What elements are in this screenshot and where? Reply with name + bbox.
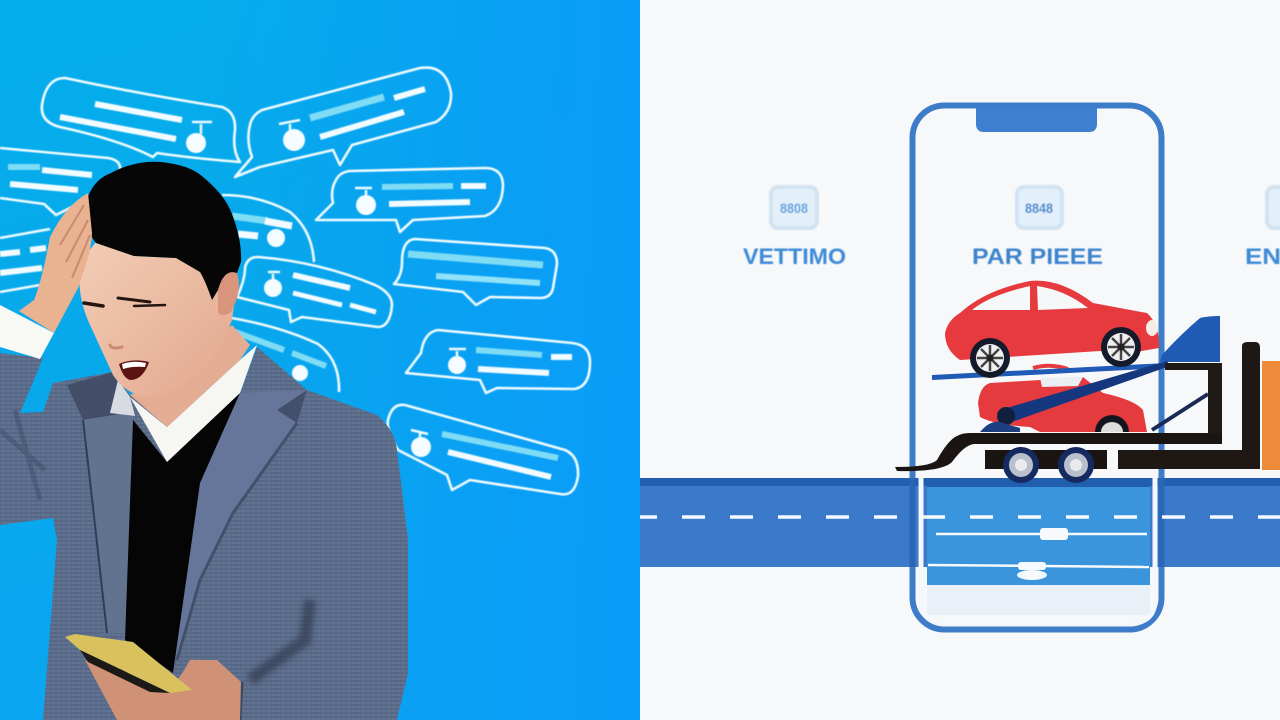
bubble: top right — [235, 68, 451, 177]
road centre dashes — [640, 515, 1280, 519]
bubble: right without icon — [394, 239, 557, 305]
label: vetting: VETTIMO — [743, 244, 846, 269]
chat bubbles cluster — [0, 68, 590, 494]
eyes and brows — [84, 298, 165, 348]
bubble: top left — [42, 78, 240, 162]
icon: cropped step — [1267, 187, 1280, 228]
shirt collar — [110, 345, 257, 462]
mouth — [119, 360, 149, 380]
shirt cuff — [0, 305, 54, 359]
label: pair price: PAR PIEEE — [972, 244, 1103, 269]
label: cropped step: EN — [1245, 244, 1280, 269]
step: cropped at right edge — [1245, 187, 1280, 269]
bubble: left top, cropped — [0, 148, 120, 215]
road band — [640, 478, 1280, 567]
ear — [218, 271, 239, 315]
phone notch — [976, 108, 1097, 132]
phone screen road — [927, 486, 1150, 585]
bubble: behind head — [222, 195, 314, 262]
upper ramp and truck frame — [895, 316, 1260, 483]
neck — [130, 325, 250, 427]
bubble: bottom right — [388, 405, 578, 494]
car carrier truck with red cars — [895, 281, 1280, 483]
lower hand holding phone — [85, 660, 241, 720]
bubble: below center — [226, 317, 339, 392]
jacket — [0, 347, 408, 720]
panel: vehicle transport app on light background — [640, 0, 1280, 720]
orange cargo box — [1262, 361, 1280, 470]
phone — [65, 634, 192, 693]
raised hand — [19, 193, 92, 333]
bubble: left lower, cropped — [0, 229, 50, 292]
jacket shading and lapels — [0, 372, 310, 720]
red car lower — [978, 366, 1147, 432]
phone mockup — [912, 106, 1162, 630]
step: pair price — [972, 187, 1103, 269]
icon: pair price: 8848 — [1025, 200, 1053, 216]
bubble: center right — [237, 257, 392, 327]
red car upper — [945, 281, 1159, 378]
man with hand on head — [0, 162, 408, 720]
icon: vetting: 8808 — [780, 200, 808, 216]
bubble: right of head upper — [316, 168, 503, 232]
panel: frustrated customer on blue background — [0, 0, 640, 720]
face — [79, 242, 236, 397]
bubble: right lower — [406, 330, 590, 393]
hair — [86, 162, 241, 300]
screen road markings — [928, 528, 1149, 580]
sweater — [125, 393, 240, 673]
step: vetting — [743, 187, 846, 269]
